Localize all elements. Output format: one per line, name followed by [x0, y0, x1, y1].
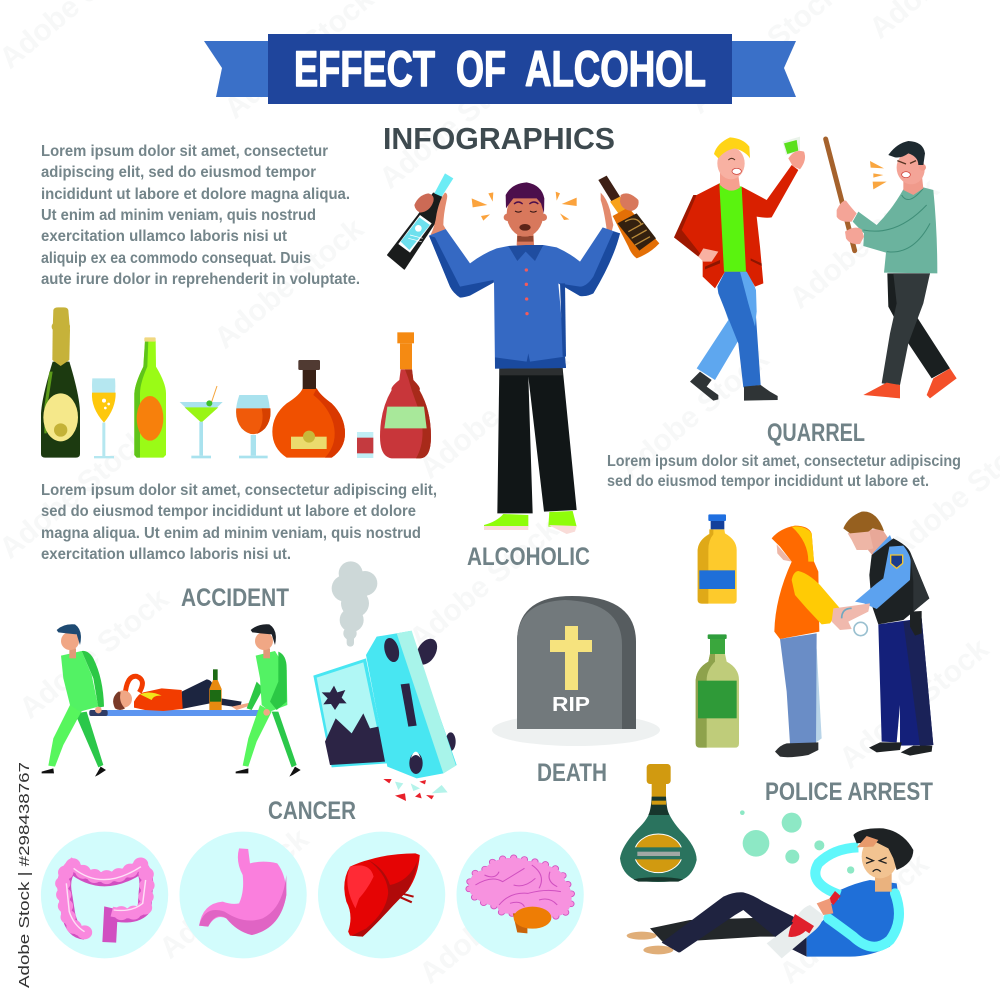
rip text: RIP: [552, 694, 590, 716]
overturned car: [313, 631, 457, 778]
cognac decanter: [272, 360, 345, 458]
bubbles: [740, 810, 854, 874]
icon: green decanter: [620, 764, 697, 882]
heading: cancer: CANCER: [268, 797, 356, 825]
ground shadow: [492, 714, 660, 746]
icon: cross: [550, 626, 592, 690]
shirt: [429, 227, 620, 369]
stick: [826, 139, 855, 251]
text block: intro: aliquip ex ea commodo consequat. Duis: [41, 250, 311, 267]
heading: accident: ACCIDENT: [181, 584, 289, 612]
text: Adobe Stock: [13, 582, 175, 725]
illustration: quarrel: [674, 137, 957, 401]
text block: quarrel: [607, 453, 961, 490]
shoes: [484, 511, 577, 534]
text: Adobe Stock: [373, 52, 535, 195]
text block: intro: adipiscing elit, sed do eiusmod tempor: [41, 164, 316, 181]
icon: bottle on stretcher: [209, 669, 222, 710]
text block: lower left: Lorem ipsum dolor sit amet, consectetur adipiscing elit,: [41, 482, 437, 499]
text block: lower left: magna aliqua. Ut enim ad minim veniam, quis nostrud: [41, 525, 421, 542]
heading: alcoholic: ALCOHOLIC: [467, 543, 590, 571]
shot glass: [357, 432, 373, 458]
icon: yellow bottle: [698, 514, 737, 604]
text block: intro: Ut enim ad minim veniam, quis nostrud: [41, 207, 316, 224]
flute glass: [92, 378, 116, 458]
text block: quarrel: sed do eiusmod tempor incididunt ut labore et.: [607, 473, 929, 490]
illustration: alcoholic man: [388, 173, 659, 534]
text block: quarrel: Lorem ipsum dolor sit amet, consectetur adipiscing: [607, 453, 961, 470]
text block: intro: incididunt ut labore et dolore magna aliqua.: [41, 186, 350, 203]
text: Adobe Stock: [153, 822, 315, 965]
illustration: police arrest: [696, 512, 933, 757]
text: Adobe Stock: [208, 212, 370, 355]
pants: [497, 368, 577, 513]
illustration: row of bottles and glasses: [41, 307, 431, 458]
icon: green bottle: [696, 634, 739, 748]
blonde man: [674, 137, 805, 401]
stock id side text: Adobe Stock | #298438767: [16, 762, 33, 988]
right carrier: [236, 624, 301, 777]
text block: intro: aute irure dolor in reprehenderit in voluptate.: [41, 271, 360, 288]
glass shards: [383, 779, 448, 801]
icon: anger sparks: [870, 161, 887, 189]
organ: liver: [318, 832, 445, 958]
title banner: EFFECT: [294, 41, 435, 97]
text block: intro: exercitation ullamco laboris nisi ut: [41, 228, 287, 245]
smoke: [332, 561, 377, 647]
text block: lower left: [41, 482, 437, 563]
champagne bottle: [41, 307, 80, 458]
title banner: OF: [456, 41, 506, 97]
stone: [517, 596, 636, 729]
head: [504, 182, 547, 261]
green bottle: [134, 337, 166, 458]
hands and handcuffs: [832, 603, 870, 636]
wine glass: [236, 395, 271, 458]
text: Adobe Stock: [773, 847, 935, 990]
arrested person: [772, 526, 840, 757]
police officer: [843, 512, 933, 756]
organ: stomach: [179, 832, 307, 958]
illustration: cancer organs: [41, 832, 584, 958]
icon: bottle in hand: [767, 891, 841, 958]
organ: brain: [457, 832, 584, 958]
stretcher: [89, 710, 270, 716]
text: Adobe Stock: [413, 342, 575, 485]
organ: colon: [41, 832, 168, 958]
left carrier: [42, 624, 106, 777]
dark haired man: [837, 141, 957, 398]
text block: lower left: sed do eiusmod tempor incididunt ut labore et dolore: [41, 503, 416, 520]
illustration: gravestone: [492, 596, 660, 746]
text block: intro: Lorem ipsum dolor sit amet, consectetur: [41, 143, 328, 160]
text block: lower left: exercitation ullamco laboris nisi ut.: [41, 546, 291, 563]
subtitle: infographics: INFOGRAPHICS: [383, 121, 615, 156]
text: Adobe Stock: [413, 847, 575, 990]
text: Adobe Stock: [613, 342, 775, 485]
icon: shock sparks: [472, 192, 577, 221]
text: Adobe Stock: [783, 172, 945, 315]
icon: right bottle: [598, 176, 659, 258]
illustration: accident stretcher: [42, 561, 457, 801]
martini glass: [180, 386, 223, 458]
title banner: [204, 34, 796, 104]
illustration: sick man and decanter: [620, 764, 913, 958]
heading: police arrest: POLICE ARREST: [765, 778, 933, 806]
injured person: [113, 676, 250, 711]
heading: quarrel: QUARREL: [767, 419, 865, 447]
heading: death: DEATH: [537, 759, 607, 787]
icon: left bottle: [388, 173, 453, 269]
text block: intro: [41, 143, 360, 288]
text: Adobe Stock: [833, 632, 995, 775]
title banner: ALCOHOL: [525, 41, 706, 97]
text: Adobe Stock: [403, 512, 565, 655]
red bottle: [380, 332, 431, 458]
lying man: [627, 828, 913, 957]
